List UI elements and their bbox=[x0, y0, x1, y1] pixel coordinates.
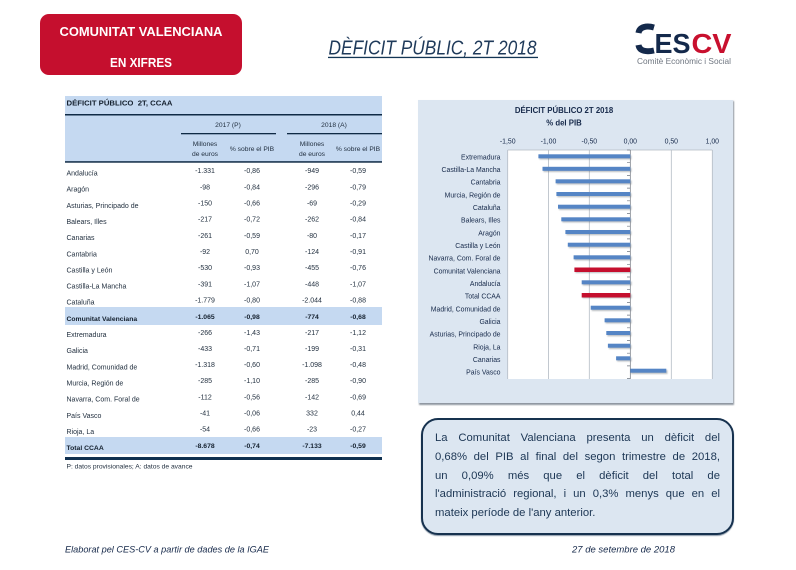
row: Madrid bbox=[66, 362, 366, 371]
row: Canarias: -0,17 bbox=[350, 233, 366, 240]
row: Murcia: -285 bbox=[305, 378, 319, 385]
row: Navarra: -0,56 bbox=[244, 394, 260, 401]
row: Balears: Balears, Illes bbox=[66, 219, 107, 226]
row: Castilla-La Mancha: -448 bbox=[305, 281, 319, 288]
table column headers bbox=[65, 114, 382, 163]
category labels: Rioja, La bbox=[473, 344, 501, 351]
row: Comunitat Valenciana bbox=[66, 314, 366, 323]
chart title: % del PIB bbox=[546, 118, 582, 128]
badge: Comunitat Valenciana en xifres: COMUNITAT VALENCIANA bbox=[60, 24, 223, 39]
table heading: DÉFICIT PÚBLICO 2T, CCAA bbox=[66, 98, 173, 107]
axis labels: 1,00 bbox=[706, 138, 719, 146]
row: Castilla y León: -455 bbox=[305, 265, 319, 272]
row: Galicia: -0,31 bbox=[350, 346, 366, 353]
row: Galicia: -199 bbox=[305, 346, 319, 353]
callout: summary text: l'administració regional, i un 0,3% menys que en el bbox=[435, 488, 720, 500]
row: Madrid: -1.098 bbox=[302, 362, 322, 369]
row: Total CCAA: -0,59 bbox=[350, 443, 366, 450]
row: Cataluña: -0,80 bbox=[244, 297, 260, 304]
row: Madrid: -0,60 bbox=[244, 362, 260, 369]
row: Aragón: -0,79 bbox=[350, 184, 366, 191]
row: Cantabria: Cantabria bbox=[66, 251, 97, 258]
row: Rioja: -0,66 bbox=[244, 427, 260, 434]
row: Castilla-La Mancha: -1,07 bbox=[350, 281, 366, 288]
row: Asturias: -0,29 bbox=[350, 200, 366, 208]
row: Galicia: Galicia bbox=[66, 348, 88, 355]
axis labels: -1,50 bbox=[500, 138, 516, 146]
zero axis bbox=[627, 150, 630, 379]
chart title: DÉFICIT PÚBLICO 2T 2018 bbox=[515, 106, 614, 115]
row: Castilla y León: -0,76 bbox=[350, 265, 366, 272]
category labels: Andalucía bbox=[470, 281, 501, 288]
row: Aragón: -0,84 bbox=[244, 184, 260, 191]
category labels: Navarra, Com. Foral de bbox=[428, 256, 501, 263]
footer: date: 27 de setembre de 2018 bbox=[571, 544, 675, 554]
axis labels: -1,00 bbox=[541, 138, 557, 146]
row: Galicia: -0,71 bbox=[244, 346, 260, 353]
title: DÈFICIT PÚBLIC, 2T 2018 bbox=[328, 36, 536, 60]
plot area and grid bbox=[508, 150, 712, 379]
callout: summary text: 0,68% del PIB al final del segon trimestre de 2018, bbox=[435, 450, 720, 462]
row: Asturias: -69 bbox=[307, 200, 317, 208]
row: Castilla-La Mancha: -391 bbox=[198, 281, 212, 288]
logo: CES CV: Comitè Econòmic i Social bbox=[637, 56, 731, 66]
category labels: País Vasco bbox=[466, 370, 501, 377]
row: Castilla y León: -0,93 bbox=[244, 265, 260, 272]
row: Comunitat Valenciana: -774 bbox=[305, 314, 319, 321]
category labels: Extremadura bbox=[461, 154, 501, 162]
category labels: Murcia, Región de bbox=[445, 192, 501, 199]
row: Andalucía: -949 bbox=[305, 168, 319, 175]
row: Cantabria bbox=[66, 249, 366, 258]
axis labels: 0,00 bbox=[624, 138, 637, 146]
row: Cataluña: -1.779 bbox=[195, 297, 215, 304]
footer: source: Elaborat pel CES-CV a partir de dades de la IGAE bbox=[65, 544, 270, 554]
bars: 2T 2018 deficit bbox=[538, 154, 666, 373]
row: Andalucía: -0,86 bbox=[244, 168, 260, 175]
logo: CES CV bbox=[637, 27, 732, 66]
logo: CES CV: ES bbox=[654, 28, 690, 59]
axis labels: -0,50 bbox=[581, 138, 597, 146]
row: Balears: -0,72 bbox=[244, 217, 260, 224]
logo: CES CV: CV bbox=[692, 28, 732, 59]
row: País Vasco: -41 bbox=[200, 410, 210, 418]
table column headers: de euros bbox=[299, 151, 326, 158]
row: Cataluña: -2.044 bbox=[302, 297, 322, 304]
row: Murcia bbox=[66, 378, 366, 388]
row: Asturias: Asturias, Principado de bbox=[66, 203, 139, 210]
table: déficit público por CCAA bbox=[65, 96, 382, 470]
row: Canarias: -261 bbox=[198, 233, 212, 240]
row: País Vasco: 332 bbox=[306, 410, 318, 418]
badge: Comunitat Valenciana en xifres bbox=[40, 14, 242, 75]
row: Navarra: -0,69 bbox=[350, 394, 366, 401]
axis labels: 0,50 bbox=[665, 138, 678, 146]
callout: summary text bbox=[421, 418, 734, 535]
row: Asturias bbox=[66, 200, 366, 210]
row: Murcia: Murcia, Región de bbox=[66, 380, 123, 388]
row: Andalucía: Andalucía bbox=[66, 170, 98, 178]
table column headers: Millones bbox=[193, 141, 218, 148]
axis labels bbox=[500, 138, 719, 146]
row: Cataluña: -0,88 bbox=[350, 297, 366, 304]
row: Canarias: Canarias bbox=[66, 235, 95, 242]
row: Castilla-La Mancha: Castilla-La Mancha bbox=[66, 284, 127, 291]
row: Aragón: -98 bbox=[200, 184, 210, 191]
category labels: Castilla-La Mancha bbox=[442, 167, 501, 174]
row: Galicia: -433 bbox=[198, 346, 212, 353]
row: Extremadura: -1,12 bbox=[350, 330, 366, 337]
category labels: Madrid, Comunidad de bbox=[431, 306, 501, 313]
row: Extremadura bbox=[66, 330, 366, 339]
row: Cantabria: 0,70 bbox=[245, 249, 259, 256]
row: Total CCAA bbox=[66, 443, 366, 452]
row: Rioja: -0,27 bbox=[350, 427, 366, 434]
row: Balears bbox=[66, 217, 366, 226]
row: Navarra: Navarra, Com. Foral de bbox=[66, 397, 140, 404]
row: Total CCAA: Total CCAA bbox=[66, 445, 104, 452]
table column headers: 2017 (P) bbox=[215, 122, 241, 129]
category labels: Aragón bbox=[478, 230, 501, 237]
panel: bar chart bbox=[418, 100, 734, 405]
category labels: Castilla y León bbox=[455, 243, 501, 250]
row: Castilla y León bbox=[66, 265, 366, 274]
row: Andalucía: -0,59 bbox=[350, 168, 366, 175]
row: Cataluña: Cataluña bbox=[66, 300, 95, 307]
row: Navarra: -112 bbox=[198, 394, 212, 401]
row: Aragón bbox=[66, 184, 366, 194]
row: Murcia: -0,90 bbox=[350, 378, 366, 385]
row: Cantabria: -92 bbox=[200, 249, 210, 256]
category labels: Balears, Illes bbox=[461, 218, 501, 225]
row: Galicia bbox=[66, 346, 366, 355]
row: Cantabria: -124 bbox=[305, 249, 319, 256]
row: Canarias: -0,59 bbox=[244, 233, 260, 240]
row: Total CCAA: -8.678 bbox=[195, 443, 215, 450]
category labels: Canarias bbox=[473, 357, 501, 364]
row: Balears: -0,84 bbox=[350, 217, 366, 224]
row: Rioja: Rioja, La bbox=[66, 429, 94, 436]
callout: summary text: un 0,09% més que el dèficit del total de bbox=[435, 470, 720, 482]
row: Madrid: -0,48 bbox=[350, 362, 366, 369]
category labels: Cataluña bbox=[473, 205, 501, 212]
row: Cantabria: -0,91 bbox=[350, 249, 366, 256]
highlighted row bands bbox=[65, 307, 382, 460]
category labels: Asturias, Principado de bbox=[430, 332, 501, 339]
row: Extremadura: -1,43 bbox=[244, 330, 260, 337]
row: Total CCAA: -0,74 bbox=[244, 443, 260, 450]
bar shadows bbox=[539, 156, 668, 374]
callout: summary text: La Comunitat Valenciana presenta un dèficit del bbox=[435, 432, 720, 444]
row: País Vasco: País Vasco bbox=[66, 413, 101, 420]
row: Castilla-La Mancha: -1,07 bbox=[244, 281, 260, 288]
row: Rioja: -54 bbox=[200, 427, 210, 434]
row: Murcia: -1,10 bbox=[244, 378, 260, 385]
row: Cataluña bbox=[66, 297, 366, 307]
table column headers: % sobre el PIB bbox=[230, 146, 275, 153]
row: Extremadura: -266 bbox=[198, 330, 212, 337]
row: Murcia: -285 bbox=[198, 378, 212, 385]
badge: Comunitat Valenciana en xifres: EN XIFRES bbox=[110, 55, 172, 70]
row: Rioja: -23 bbox=[307, 427, 317, 434]
category labels: Cantabria bbox=[471, 180, 501, 187]
row: Madrid: Madrid, Comunidad de bbox=[66, 364, 137, 371]
row: Andalucía bbox=[66, 168, 366, 178]
row: Aragón: Aragón bbox=[66, 187, 89, 194]
row: Castilla y León: -530 bbox=[198, 265, 212, 272]
row: Castilla-La Mancha bbox=[66, 281, 366, 291]
row: Comunitat Valenciana: -0,68 bbox=[350, 314, 366, 321]
row: Balears: -217 bbox=[198, 217, 212, 224]
row: Aragón: -296 bbox=[305, 184, 319, 191]
category labels bbox=[428, 154, 501, 377]
row: Canarias: -80 bbox=[307, 233, 317, 240]
row: Extremadura: Extremadura bbox=[66, 332, 107, 339]
row: Andalucía: -1.331 bbox=[195, 168, 215, 175]
chart title bbox=[515, 106, 614, 128]
category labels: Comunitat Valenciana bbox=[434, 268, 501, 275]
row: Castilla y León: Castilla y León bbox=[66, 267, 113, 274]
table footnote: P: datos provisionales; A: datos de avance bbox=[66, 464, 193, 470]
table column headers: de euros bbox=[192, 151, 219, 158]
row: Balears: -262 bbox=[305, 217, 319, 224]
category labels: Galicia bbox=[479, 319, 501, 326]
row: Asturias: -0,66 bbox=[244, 200, 260, 208]
row: Rioja bbox=[66, 427, 366, 436]
callout: summary text: mateix període de l'any anterior. bbox=[435, 507, 595, 519]
row: Total CCAA: -7.133 bbox=[302, 443, 322, 450]
table heading bbox=[65, 96, 382, 114]
row: Canarias bbox=[66, 233, 366, 242]
row: Asturias: -150 bbox=[198, 200, 212, 208]
row: Madrid: -1.318 bbox=[195, 362, 215, 369]
table column headers: % sobre el PIB bbox=[336, 146, 381, 153]
row: País Vasco: -0,06 bbox=[244, 410, 260, 418]
row: Comunitat Valenciana: Comunitat Valenciana bbox=[66, 316, 137, 323]
table column headers: 2018 (A) bbox=[321, 122, 347, 129]
row: Navarra bbox=[66, 394, 366, 404]
row: País Vasco bbox=[66, 410, 365, 420]
row: Extremadura: -217 bbox=[305, 330, 319, 337]
category labels: Total CCAA bbox=[465, 294, 501, 301]
row: Comunitat Valenciana: -0,98 bbox=[244, 314, 260, 321]
row: Comunitat Valenciana: -1.065 bbox=[195, 314, 215, 321]
row: País Vasco: 0,44 bbox=[351, 410, 365, 418]
table column headers: Millones bbox=[300, 141, 325, 148]
row: Navarra: -142 bbox=[305, 394, 319, 401]
